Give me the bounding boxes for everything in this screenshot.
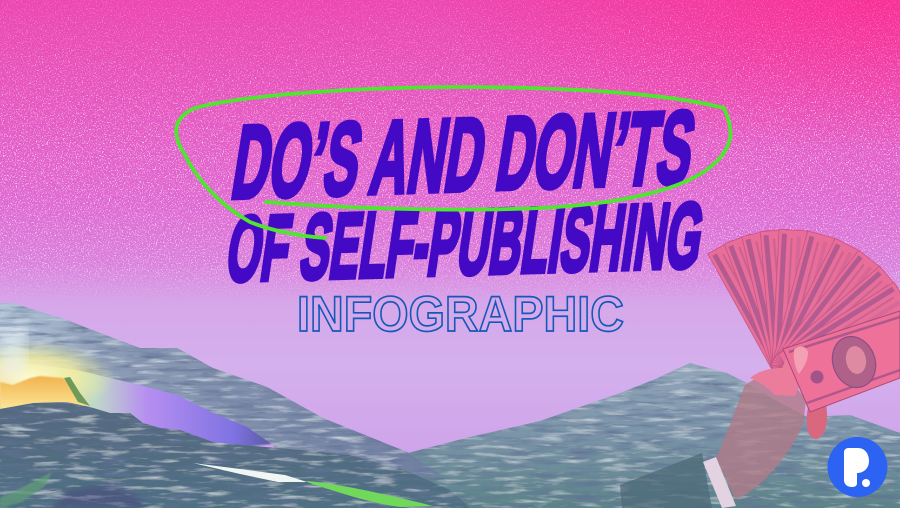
money and hand xyxy=(620,229,900,508)
green hand-drawn ellipse xyxy=(176,87,730,238)
green patch xyxy=(0,472,52,508)
logo xyxy=(828,437,888,497)
green peak accent xyxy=(64,377,90,406)
logo circle xyxy=(828,437,888,497)
logo dot xyxy=(862,479,870,487)
portrait oval xyxy=(825,330,883,394)
violet pool under the ridge xyxy=(20,360,272,447)
logo P xyxy=(844,448,869,487)
front left hill xyxy=(0,402,470,508)
sleeve xyxy=(620,453,712,508)
upper hand and thumb xyxy=(750,345,808,396)
fingers below the bills xyxy=(806,405,827,439)
fan of dollar bills xyxy=(708,229,900,378)
light rays xyxy=(0,330,26,375)
glow on the left horizon xyxy=(0,340,115,416)
background speckle xyxy=(0,0,900,305)
golden lit peak xyxy=(0,376,90,412)
subtitle outlined: INFOGRAPHIC xyxy=(297,286,624,342)
shirt cuff xyxy=(703,457,736,508)
background hot pink corner xyxy=(0,0,900,300)
right mountain xyxy=(400,363,900,508)
front dollar bill xyxy=(783,311,900,412)
portrait face xyxy=(844,344,868,376)
dark violet patch xyxy=(50,485,150,508)
bill border lines xyxy=(789,317,900,403)
white stream xyxy=(193,463,307,482)
hand xyxy=(716,372,806,499)
thumb nail xyxy=(794,346,808,374)
landscape xyxy=(0,303,900,508)
green stream xyxy=(307,481,433,507)
left back ridge xyxy=(0,303,440,480)
bill seal xyxy=(810,370,824,384)
